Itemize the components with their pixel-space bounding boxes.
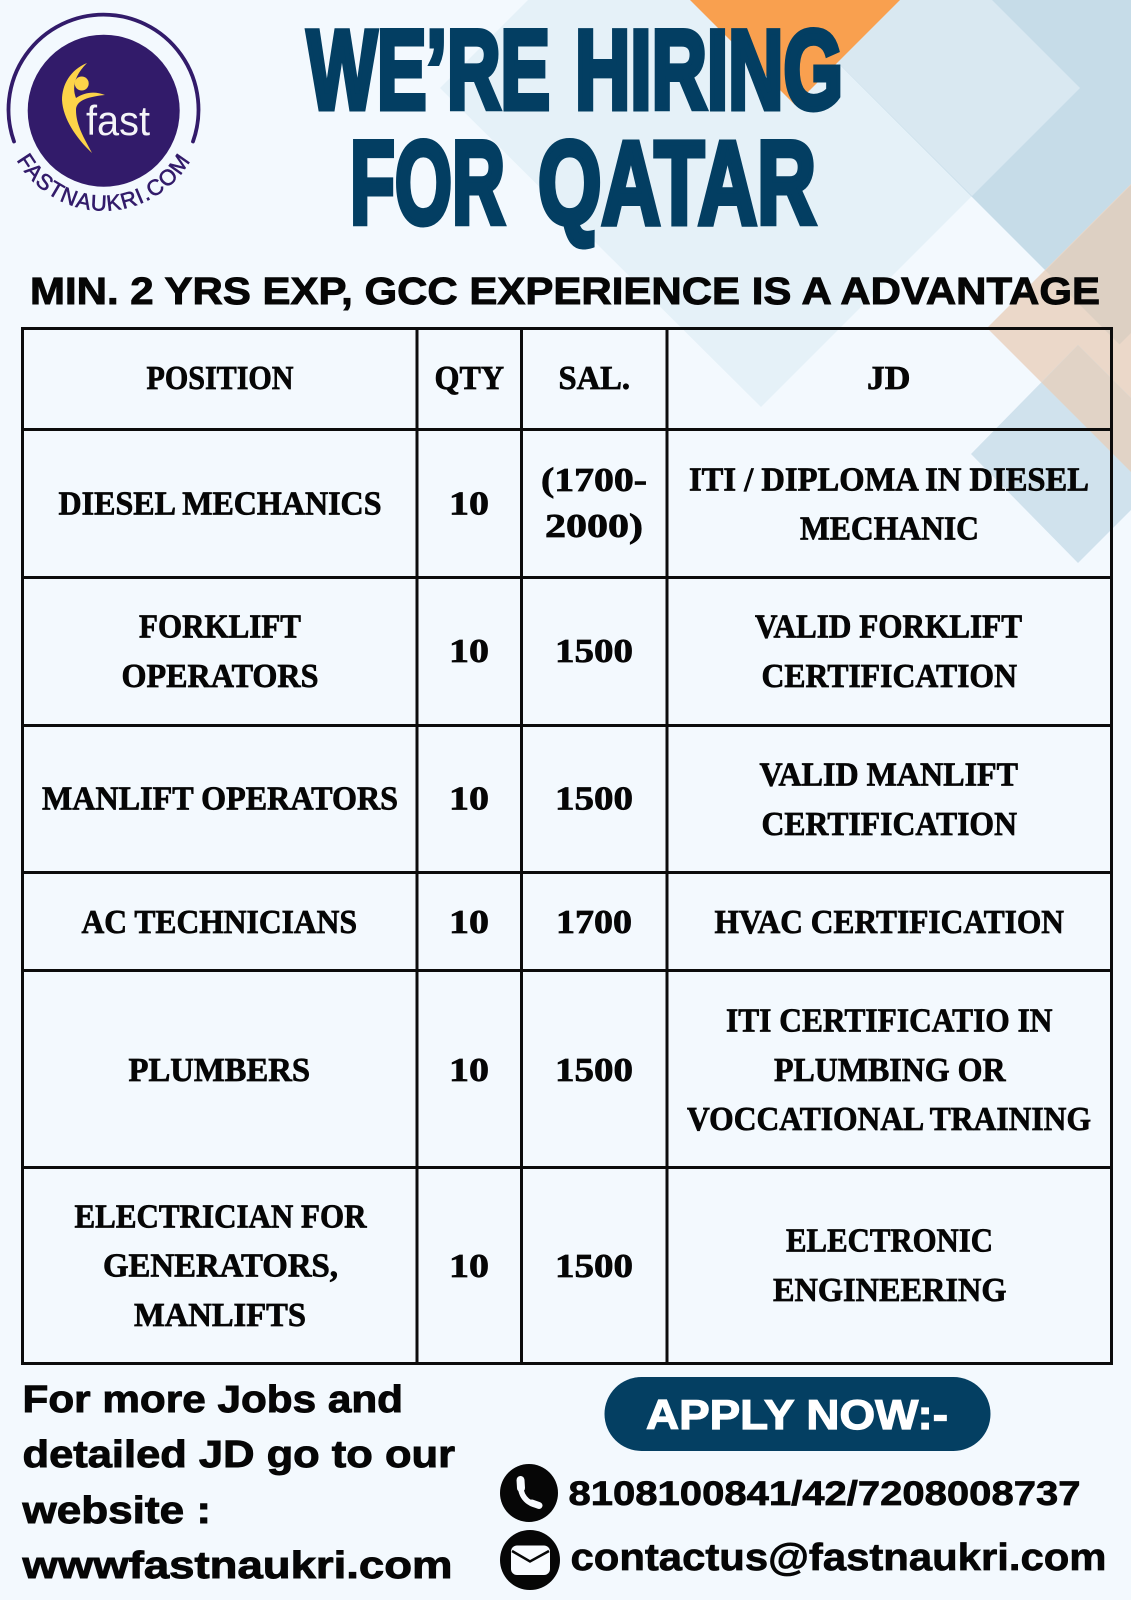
row: ac technicians: 1700 bbox=[556, 904, 632, 941]
row: manlift operators: MANLIFT OPERATORS bbox=[42, 780, 398, 818]
table header: QTY bbox=[434, 360, 504, 397]
row: forklift operators: FORKLIFT bbox=[139, 608, 301, 646]
row: electrician: 10 bbox=[449, 1248, 489, 1285]
apply now button: APPLY NOW:- bbox=[646, 1391, 948, 1438]
row: forklift operators: VALID FORKLIFT bbox=[755, 608, 1022, 646]
table bbox=[22, 328, 1112, 1364]
table header: JD bbox=[867, 360, 910, 397]
row: ac technicians bbox=[82, 904, 1064, 941]
title: QATAR bbox=[538, 118, 816, 250]
website note: wwwfastnaukri.com bbox=[21, 1545, 452, 1587]
row: forklift operators bbox=[122, 608, 1022, 695]
row: diesel mechanics: 2000) bbox=[545, 508, 643, 545]
row: ac technicians: 10 bbox=[449, 904, 489, 941]
row: manlift operators bbox=[42, 756, 1018, 843]
icon: phone bbox=[500, 1464, 558, 1522]
row: forklift operators: OPERATORS bbox=[122, 658, 318, 695]
icon: email bbox=[500, 1530, 560, 1590]
row: plumbers: 1500 bbox=[555, 1052, 633, 1089]
row: diesel mechanics: MECHANIC bbox=[800, 510, 979, 548]
row: plumbers: PLUMBING OR bbox=[774, 1052, 1006, 1089]
row: diesel mechanics: ITI / DIPLOMA IN DIESEL bbox=[689, 462, 1089, 498]
row: manlift operators: CERTIFICATION bbox=[762, 806, 1017, 843]
row: electrician bbox=[74, 1198, 1006, 1334]
logo curved url: FASTNAUKRI.COM bbox=[17, 152, 190, 211]
row: electrician: 1500 bbox=[555, 1248, 633, 1285]
row: plumbers: 10 bbox=[449, 1052, 489, 1089]
email address: contactus@fastnaukri.com bbox=[570, 1537, 1106, 1579]
website note: For more Jobs and bbox=[22, 1379, 403, 1421]
logo disc bbox=[28, 35, 180, 187]
title bbox=[307, 8, 843, 250]
logo: fast bbox=[6, 12, 200, 211]
background geometric diamonds bbox=[440, 0, 1131, 563]
table header bbox=[146, 360, 910, 397]
row: manlift operators: 1500 bbox=[555, 780, 633, 818]
website note bbox=[21, 1379, 455, 1587]
logo ring bbox=[9, 15, 198, 141]
row: diesel mechanics: 10 bbox=[449, 486, 489, 522]
title: HIRING bbox=[575, 8, 843, 132]
website note: detailed JD go to our bbox=[22, 1434, 455, 1476]
row: diesel mechanics: (1700- bbox=[541, 462, 647, 499]
row: forklift operators: CERTIFICATION bbox=[762, 658, 1017, 695]
row: electrician: MANLIFTS bbox=[134, 1297, 306, 1334]
row: manlift operators: 10 bbox=[449, 780, 489, 818]
row: forklift operators: 1500 bbox=[555, 633, 633, 670]
row: electrician: ELECTRONIC bbox=[786, 1222, 993, 1260]
apply now button bbox=[604, 1377, 990, 1451]
row: manlift operators: VALID MANLIFT bbox=[760, 756, 1018, 794]
row: plumbers: PLUMBERS bbox=[128, 1052, 310, 1089]
row: ac technicians: AC TECHNICIANS bbox=[82, 904, 357, 941]
table header: SAL. bbox=[558, 360, 630, 397]
table header: POSITION bbox=[146, 360, 294, 397]
table grid bbox=[22, 328, 1112, 1364]
title: FOR bbox=[350, 118, 505, 250]
row: electrician: ENGINEERING bbox=[773, 1272, 1006, 1309]
row: plumbers: ITI CERTIFICATIO IN bbox=[726, 1002, 1053, 1040]
row: diesel mechanics bbox=[58, 462, 1089, 548]
title: WE’RE bbox=[307, 8, 550, 132]
row: electrician: ELECTRICIAN FOR bbox=[74, 1198, 367, 1236]
icon: yellow figure bbox=[62, 63, 105, 153]
website note: website : bbox=[21, 1490, 211, 1532]
row: electrician: GENERATORS, bbox=[103, 1248, 338, 1284]
row: plumbers bbox=[128, 1002, 1091, 1138]
logo wordmark: fast bbox=[86, 97, 150, 144]
row: diesel mechanics: DIESEL MECHANICS bbox=[58, 486, 382, 522]
phone number: 8108100841/42/7208008737 bbox=[568, 1475, 1080, 1513]
subtitle: MIN. 2 YRS EXP, GCC EXPERIENCE IS A ADVANTAGE bbox=[30, 271, 1100, 313]
row: forklift operators: 10 bbox=[449, 633, 489, 670]
row: plumbers: VOCCATIONAL TRAINING bbox=[687, 1101, 1091, 1138]
row: ac technicians: HVAC CERTIFICATION bbox=[714, 904, 1064, 941]
